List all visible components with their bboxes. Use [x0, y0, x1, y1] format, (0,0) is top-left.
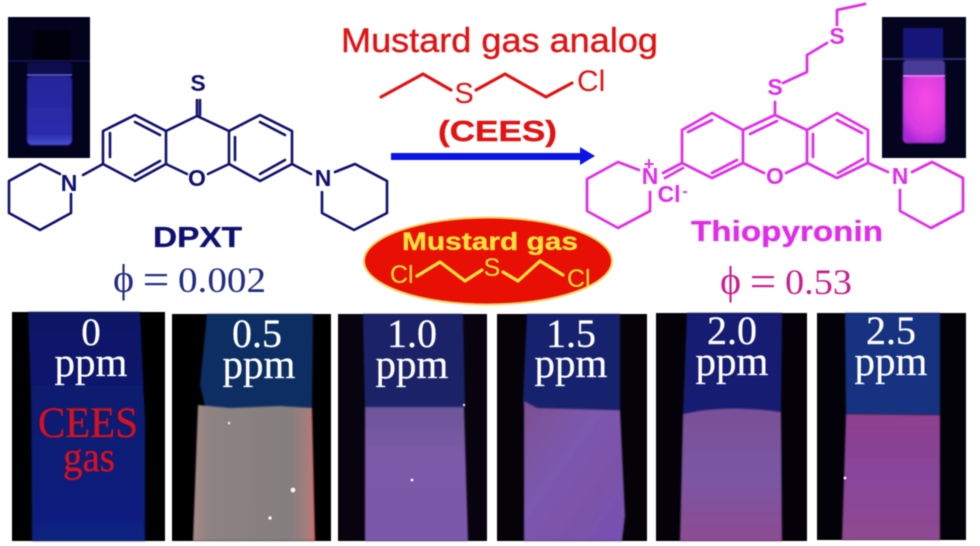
panel: 1.0 ppm test strip — [338, 311, 487, 541]
photo: DPXT vial under UV — [8, 17, 90, 158]
callout: Mustard gas oval: Cl — [390, 261, 414, 289]
atom labels — [61, 70, 331, 196]
arrow: reaction — [391, 147, 595, 165]
panel: 0 ppm test strip: 0 — [81, 311, 101, 354]
quantum yield: Thiopyronin: ϕ — [720, 258, 741, 303]
atom labels: N — [892, 163, 908, 189]
atom labels: Cl — [658, 181, 680, 207]
quantum yield: DPXT — [113, 256, 266, 301]
heading: Mustard gas analog: Mustard gas analog — [341, 22, 658, 60]
panel: 2.5 ppm test strip: 2.5 — [866, 308, 916, 353]
atom labels: O — [766, 163, 784, 189]
atom labels: N — [642, 163, 658, 189]
compound name: Thiopyronin: Thiopyronin — [691, 216, 883, 248]
quantum yield: DPXT: ϕ — [113, 256, 134, 301]
panel: 0 ppm test strip — [12, 311, 165, 541]
atom labels — [642, 23, 908, 207]
atom labels: O — [188, 165, 206, 191]
panel: 1.0 ppm test strip: 1.0 — [387, 311, 437, 356]
atom labels: + — [644, 154, 654, 174]
panel: 0.5 ppm test strip: ppm — [223, 341, 296, 387]
quantum yield: Thiopyronin: 0.53 — [785, 262, 852, 302]
panel: 2.0 ppm test strip — [656, 308, 807, 541]
label: CEES gas: gas — [63, 435, 115, 481]
panel: 1.5 ppm test strip — [497, 311, 647, 541]
chemical structure: CEES: Cl — [577, 65, 605, 98]
atom labels: N — [61, 170, 77, 196]
atom labels: S — [767, 74, 783, 100]
quantum yield: Thiopyronin — [720, 258, 852, 303]
atom labels: S — [190, 70, 206, 96]
photo: Thiopyronin vial under UV — [882, 17, 966, 158]
label: CEES gas: CEES — [38, 400, 138, 447]
chemical structure: CEES: S — [454, 78, 474, 110]
callout: Mustard gas oval: S — [484, 254, 500, 282]
panel: 2.5 ppm test strip — [817, 308, 966, 540]
callout: Mustard gas oval: Cl — [567, 265, 591, 293]
label: CEES gas — [38, 400, 138, 481]
quantum yield: DPXT: 0.002 — [178, 260, 266, 300]
chemical structure: CEES — [381, 65, 605, 110]
label: (CEES): (CEES) — [438, 116, 557, 148]
panel: 2.0 ppm test strip: ppm — [696, 338, 769, 384]
atom labels: S — [829, 23, 845, 49]
atom labels: N — [315, 165, 331, 191]
compound name: DPXT: DPXT — [153, 222, 242, 254]
callout: Mustard gas oval — [364, 218, 612, 304]
panel: 1.5 ppm test strip: ppm — [535, 340, 608, 386]
panel: 0 ppm test strip: ppm — [55, 339, 128, 385]
chemical structure: DPXT — [9, 70, 387, 230]
panel: 1.0 ppm test strip: ppm — [376, 341, 449, 387]
panel: 1.5 ppm test strip: 1.5 — [546, 311, 596, 356]
panel: 2.0 ppm test strip: 2.0 — [707, 308, 757, 353]
chemical structure: Thiopyronin — [587, 4, 963, 228]
panel: 2.5 ppm test strip: ppm — [855, 338, 928, 384]
atom labels: - — [682, 183, 688, 200]
panel: 0.5 ppm test strip: 0.5 — [232, 311, 282, 356]
callout: Mustard gas oval: Mustard gas — [402, 228, 578, 256]
panel: 0.5 ppm test strip — [172, 311, 331, 541]
